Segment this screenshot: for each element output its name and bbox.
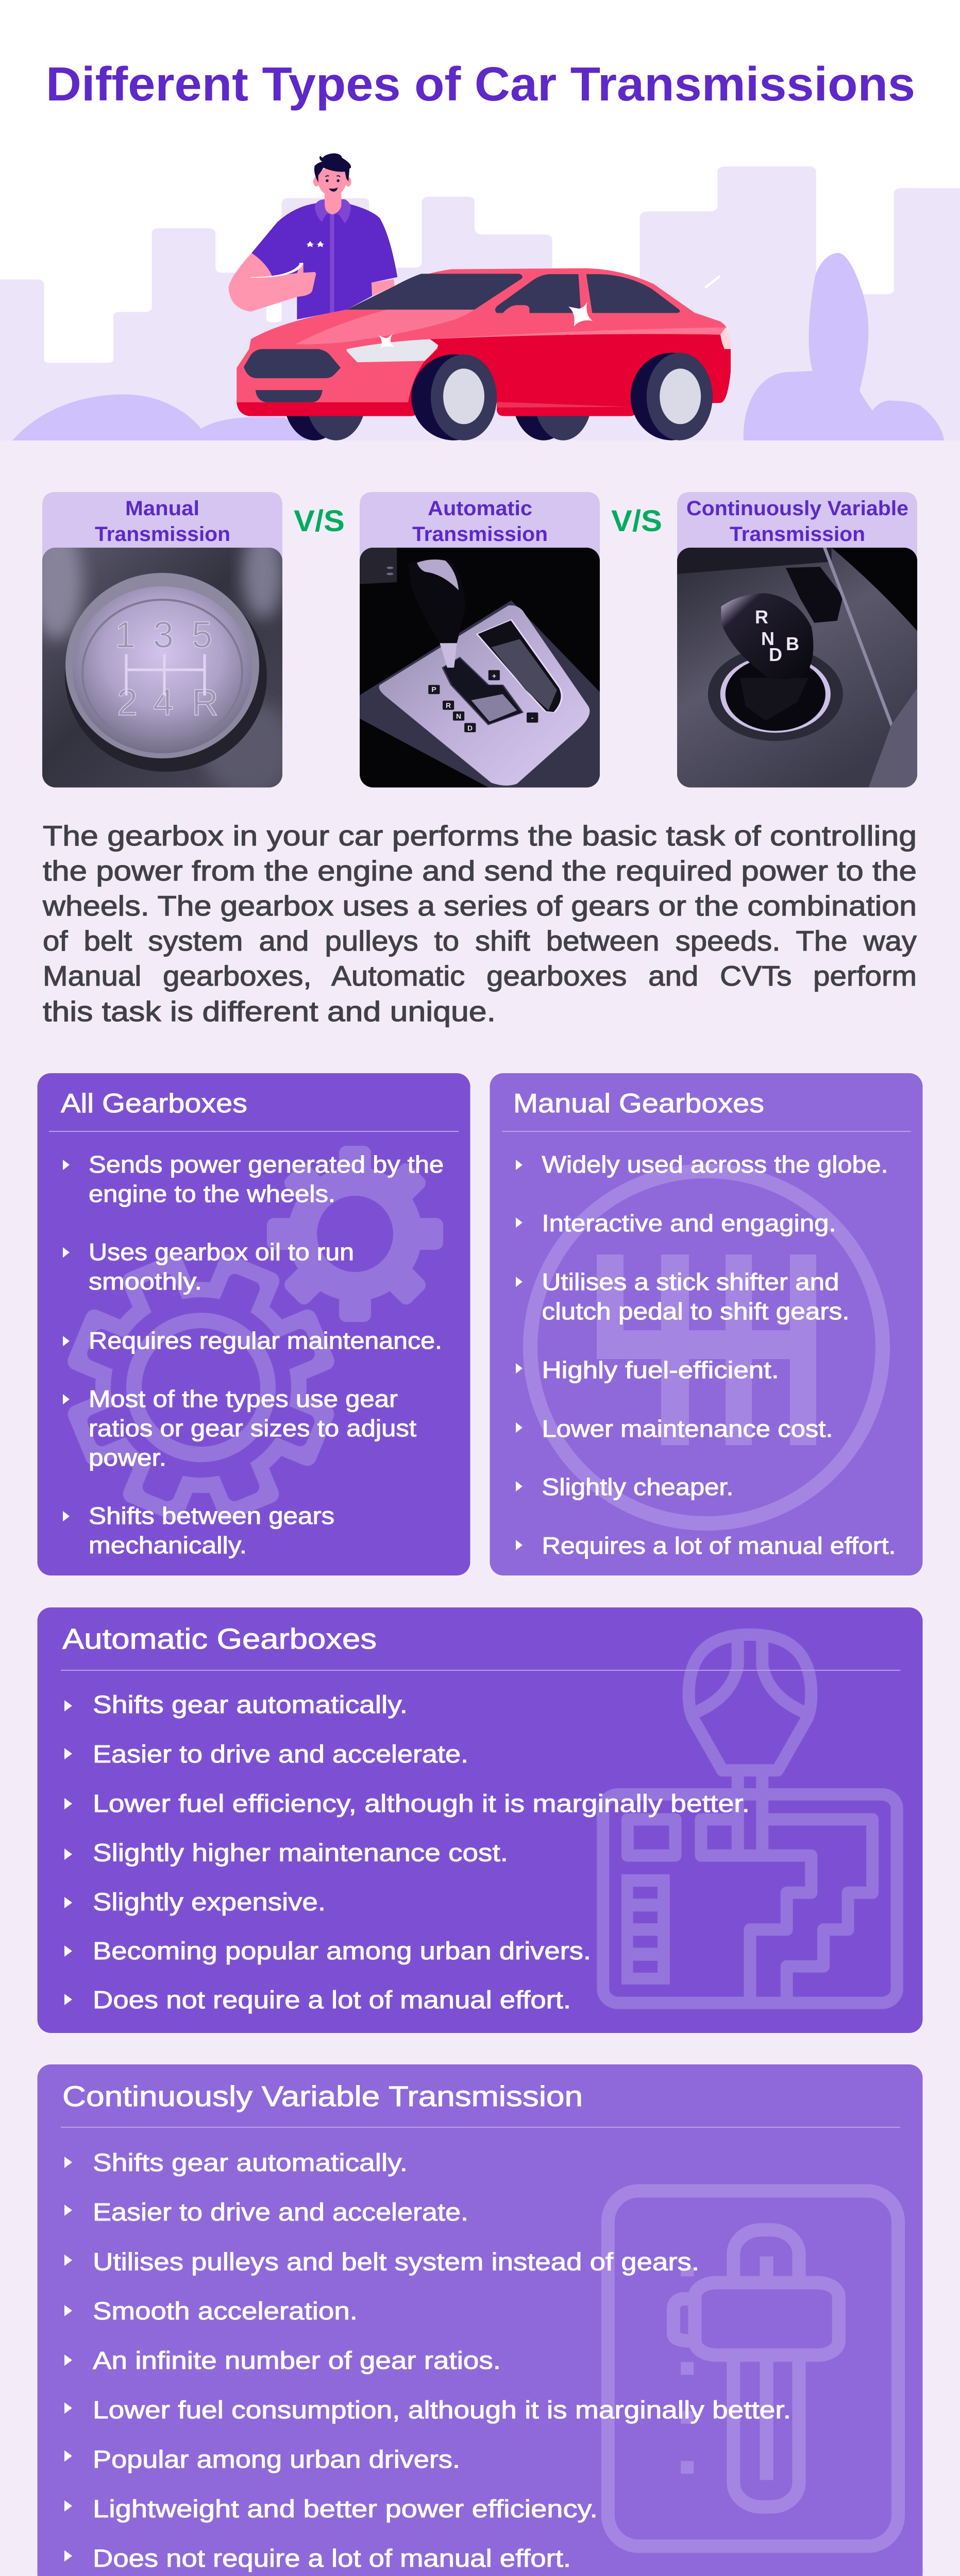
bullet list: Requires a lot of manual effort.	[542, 1532, 896, 1559]
bullet list: mechanically.	[89, 1532, 247, 1558]
card: manual transmission	[42, 492, 282, 787]
bullet list: Lower maintenance cost.	[542, 1415, 833, 1442]
plants	[12, 253, 944, 440]
rear wheels	[283, 354, 592, 440]
bullet list: Sends power generated by the	[89, 1151, 444, 1178]
bullet list: Lightweight and better power efficiency.	[93, 2496, 598, 2523]
bullet list: Shifts gear automatically.	[93, 1691, 408, 1719]
bullet list: Becoming popular among urban drivers.	[93, 1938, 591, 1965]
bullet list: Widely used across the globe.	[542, 1151, 888, 1178]
panel: continuously variable transmission	[37, 2064, 922, 2576]
title: Different Types of Car Transmissions	[46, 57, 915, 111]
illustration: man with thumbs up	[228, 154, 397, 319]
V/S label: V/S	[611, 504, 662, 538]
intro paragraph: of belt system and pulleys to shift between speeds. The way	[43, 925, 917, 957]
photo: automatic shifter	[360, 548, 600, 788]
photo: manual gear knob: 1	[115, 615, 136, 656]
card heading: Manual	[125, 497, 199, 520]
panel: manual gearboxes	[490, 1073, 922, 1575]
intro paragraph: wheels. The gearbox uses a series of gears or the combination	[42, 890, 917, 922]
photo: automatic shifter: D	[467, 724, 473, 732]
photo: automatic shifter: N	[456, 712, 461, 720]
card heading	[360, 492, 600, 562]
bullet list: Slightly higher maintenance cost.	[93, 1839, 508, 1867]
card heading: Transmission	[730, 523, 865, 546]
panel heading: All Gearboxes	[61, 1089, 247, 1118]
icon: automatic shifter watermark	[603, 1635, 897, 2003]
V/S label: V/S	[294, 504, 345, 538]
card heading: Transmission	[95, 523, 230, 546]
bullet list: Easier to drive and accelerate.	[93, 1741, 468, 1768]
bullet list: Does not require a lot of manual effort.	[93, 1987, 571, 2014]
photo: manual gear knob: 2	[117, 682, 138, 723]
panel: all gearboxes	[37, 1073, 470, 1575]
bullet list: Popular among urban drivers.	[93, 2446, 460, 2473]
card heading: Continuously Variable	[686, 497, 908, 520]
bullet list	[63, 1151, 444, 1558]
bullet list: Uses gearbox oil to run	[89, 1239, 354, 1265]
intro paragraph: The gearbox in your car performs the basic task of controlling	[43, 820, 917, 852]
photo: automatic shifter: +	[492, 672, 496, 680]
bullet list: Utilises a stick shifter and	[542, 1268, 839, 1295]
bullet list: Slightly expensive.	[93, 1889, 326, 1916]
bullet list	[64, 1691, 750, 2014]
photo: CVT shifter: N	[761, 628, 774, 649]
bullet list: Utilises pulleys and belt system instead of gears.	[93, 2248, 699, 2276]
bullet list: Shifts between gears	[89, 1502, 334, 1529]
bullet list: Smooth acceleration.	[93, 2298, 358, 2325]
bullet list: Does not require a lot of manual effort.	[93, 2545, 571, 2572]
card heading	[677, 492, 917, 562]
panel heading: Automatic Gearboxes	[62, 1622, 377, 1655]
panel heading: Continuously Variable Transmission	[62, 2080, 583, 2112]
icon: gears watermark	[65, 1146, 443, 1523]
card heading: Automatic	[428, 497, 532, 520]
illustration: red car	[237, 268, 731, 440]
panel: automatic gearboxes	[37, 1607, 922, 2033]
bullet list: clutch pedal to shift gears.	[542, 1298, 849, 1325]
front wheels	[411, 353, 713, 440]
bullet list: An infinite number of gear ratios.	[93, 2347, 501, 2375]
photo: automatic shifter: R	[446, 701, 451, 709]
icon: gear shift pattern watermark	[530, 1171, 883, 1523]
card: automatic transmission	[360, 492, 600, 788]
card: continuously variable transmission	[677, 492, 917, 788]
card heading: Transmission	[412, 523, 548, 546]
photo: CVT shifter: D	[769, 644, 782, 665]
intro paragraph: the power from the engine and send the required power to the	[43, 855, 917, 887]
photo: CVT shifter: B	[786, 633, 799, 654]
bullet list: ratios or gear sizes to adjust	[89, 1415, 416, 1442]
bullet list: Easier to drive and accelerate.	[93, 2199, 468, 2226]
photo: CVT shifter	[677, 548, 917, 788]
ground strip	[0, 440, 960, 492]
intro paragraph: this task is different and unique.	[43, 995, 496, 1027]
bullet list: Most of the types use gear	[89, 1385, 398, 1412]
header illustration background	[0, 0, 960, 440]
icon: CVT shifter watermark	[608, 2191, 898, 2546]
bullet list	[516, 1151, 896, 1559]
bullet list: Lower fuel efficiency, although it is marginally better.	[93, 1790, 750, 1818]
photo: CVT shifter: R	[755, 606, 768, 628]
bullet list: power.	[89, 1444, 166, 1471]
photo: manual gear knob: 5	[192, 615, 212, 656]
panel heading: Manual Gearboxes	[513, 1089, 764, 1118]
bullet list: smoothly.	[89, 1268, 202, 1295]
bullet list: Interactive and engaging.	[542, 1210, 836, 1236]
bullet list: Slightly cheaper.	[542, 1473, 734, 1500]
bullet list: Shifts gear automatically.	[93, 2149, 408, 2177]
car body	[237, 268, 731, 416]
photo: manual gear knob: 4	[153, 682, 174, 723]
photo: manual gear knob: R	[192, 682, 218, 723]
bullet list: Lower fuel consumption, although it is marginally better.	[93, 2397, 791, 2424]
bullet list: engine to the wheels.	[89, 1180, 335, 1207]
intro paragraph	[42, 820, 917, 1027]
card heading	[42, 492, 282, 562]
bullet list: Requires regular maintenance.	[89, 1327, 442, 1354]
photo: manual gear knob	[42, 548, 282, 787]
photo: manual gear knob: 3	[153, 615, 174, 656]
photo: automatic shifter: P	[431, 685, 436, 693]
bullet list	[64, 2149, 791, 2572]
bullet list: Highly fuel-efficient.	[542, 1357, 779, 1383]
intro paragraph: Manual gearboxes, Automatic gearboxes and CVTs perform	[43, 960, 917, 992]
photo: automatic shifter: -	[531, 714, 534, 722]
